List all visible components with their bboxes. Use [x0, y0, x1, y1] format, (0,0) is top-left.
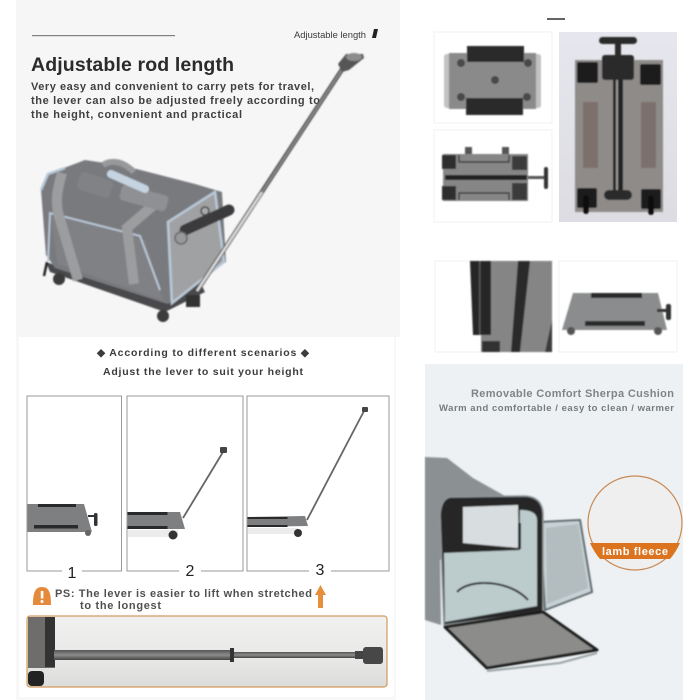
step number 2: 2 [186, 563, 195, 580]
base and wheels [44, 262, 205, 322]
photo: carrier from below [434, 32, 552, 123]
note text: to the longest [80, 600, 161, 612]
pet carrier with extended rod [41, 53, 364, 322]
bag body [41, 160, 226, 304]
photo: base board [559, 261, 677, 352]
note text [55, 588, 312, 612]
step number 3 [309, 560, 331, 582]
straps [57, 173, 78, 280]
fleece swatch: lamb fleece [602, 546, 668, 558]
header rule and label: Adjustable length [294, 30, 366, 41]
arrow: up [315, 585, 326, 608]
door flap [445, 612, 597, 668]
top pockets [76, 171, 114, 199]
interior [444, 510, 537, 622]
scenario heading [96, 347, 310, 378]
panel: lever positions [16, 337, 396, 700]
scenario heading: Adjust the lever to suit your height [103, 366, 304, 378]
open carrier [425, 457, 597, 671]
photo: underside with handle [559, 32, 677, 222]
step number 1 [62, 561, 82, 582]
panel: product detail photos [434, 18, 677, 352]
description text: Very easy and convenient to carry pets for travel, [31, 81, 314, 93]
photo: wheel base from above [434, 130, 552, 222]
description text [31, 81, 320, 121]
door frame [440, 496, 543, 625]
description text: the height, convenient and practical [31, 109, 242, 121]
cushion heading: Removable Comfort Sherpa Cushion [471, 388, 674, 400]
cushion subheading: Warm and comfortable / easy to clean / warmer [439, 403, 674, 414]
panel: sherpa cushion [425, 364, 683, 700]
icon: warning [33, 587, 51, 605]
telescopic rod [197, 53, 364, 291]
step number 1: 1 [68, 565, 77, 582]
panel: adjustable rod length [16, 0, 400, 337]
heading: Adjustable rod length [31, 54, 234, 76]
step 3 box [247, 396, 389, 571]
expanded side [540, 520, 592, 610]
step number 2 [179, 560, 201, 582]
top handle [103, 162, 134, 172]
carrier shell [425, 457, 505, 625]
header rule and label [32, 29, 378, 41]
black side handle and roll [185, 210, 229, 230]
extended rod photo [27, 616, 387, 687]
scenario heading: ◆ According to different scenarios ◆ [96, 347, 310, 359]
fleece swatch [588, 476, 682, 570]
photo: side strap close-up [435, 261, 552, 352]
bag end opening [168, 192, 224, 303]
description text: the lever can also be adjusted freely according to [31, 95, 320, 107]
step number 3: 3 [316, 562, 325, 579]
front pocket zip [48, 213, 160, 290]
note text: PS: The lever is easier to lift when stretched [55, 588, 312, 600]
step 2 box [127, 396, 243, 571]
step 1 box [27, 396, 122, 571]
